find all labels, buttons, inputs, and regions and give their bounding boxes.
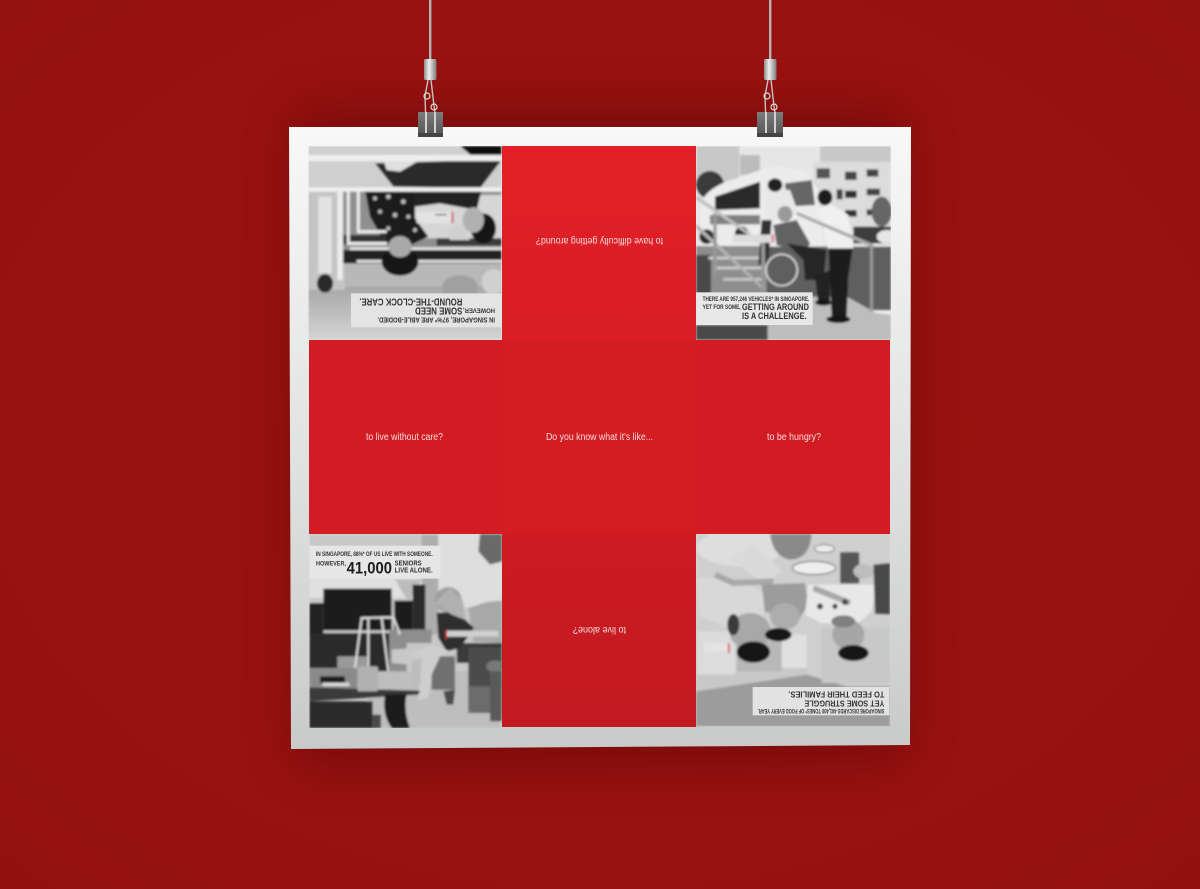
- caption box: YET SOME STRUGGLE: [804, 698, 884, 708]
- caption box: [351, 293, 502, 327]
- caption box: LIVE ALONE.: [395, 567, 433, 574]
- photo panel: getting around: [696, 146, 897, 340]
- caption box: SENIORS: [395, 561, 422, 568]
- poster shadow: [295, 112, 905, 764]
- poster mockup scene: [281, 0, 919, 778]
- caption box: THERE ARE 957,246 VEHICLES* IN SINGAPORE.: [703, 297, 810, 303]
- caption box: [696, 292, 813, 325]
- photo panel: living alone: [309, 534, 504, 728]
- caption box: [753, 687, 889, 715]
- caption box: HOWEVER,: [316, 561, 346, 567]
- caption box: 41,000: [347, 558, 392, 577]
- photo panel: round-the-clock care (upside down): [308, 146, 505, 340]
- right hanging wire and binder clip: [757, 0, 783, 137]
- caption box: ROUND-THE-CLOCK CARE.: [359, 295, 462, 306]
- left hanging wire and binder clip: [418, 0, 443, 137]
- question: to live alone: to live alone?: [573, 624, 626, 635]
- red cross panel: centre column and middle row: [309, 146, 890, 727]
- caption box: GETTING AROUND: [742, 302, 809, 312]
- question: do you know what it's like: Do you know what it's like...: [546, 432, 653, 443]
- caption box: SOME NEED: [415, 305, 462, 316]
- question: to be hungry: to be hungry?: [767, 432, 821, 443]
- caption box: SINGAPORE DISCARDS 481,400 TONES* OF FOOD EVERY YEAR.: [757, 707, 884, 713]
- caption box: [309, 546, 441, 579]
- photo panel: feeding families (upside down): [696, 530, 890, 726]
- caption box: IS A CHALLENGE.: [742, 311, 807, 321]
- caption box: TO FEED THEIR FAMILIES.: [788, 689, 884, 699]
- caption box: HOWEVER,: [463, 306, 495, 313]
- poster sheet: [289, 127, 911, 749]
- caption box: YET FOR SOME,: [703, 305, 741, 311]
- caption box: IN SINGAPORE, 88%* OF US LIVE WITH SOMEONE.: [316, 552, 433, 558]
- question: to have difficulty getting around: to have difficulty getting around?: [536, 235, 663, 246]
- question: to live without care: to live without care?: [366, 432, 443, 443]
- caption box: IN SINGAPORE, 97%* ARE ABLE-BODIED.: [377, 316, 495, 323]
